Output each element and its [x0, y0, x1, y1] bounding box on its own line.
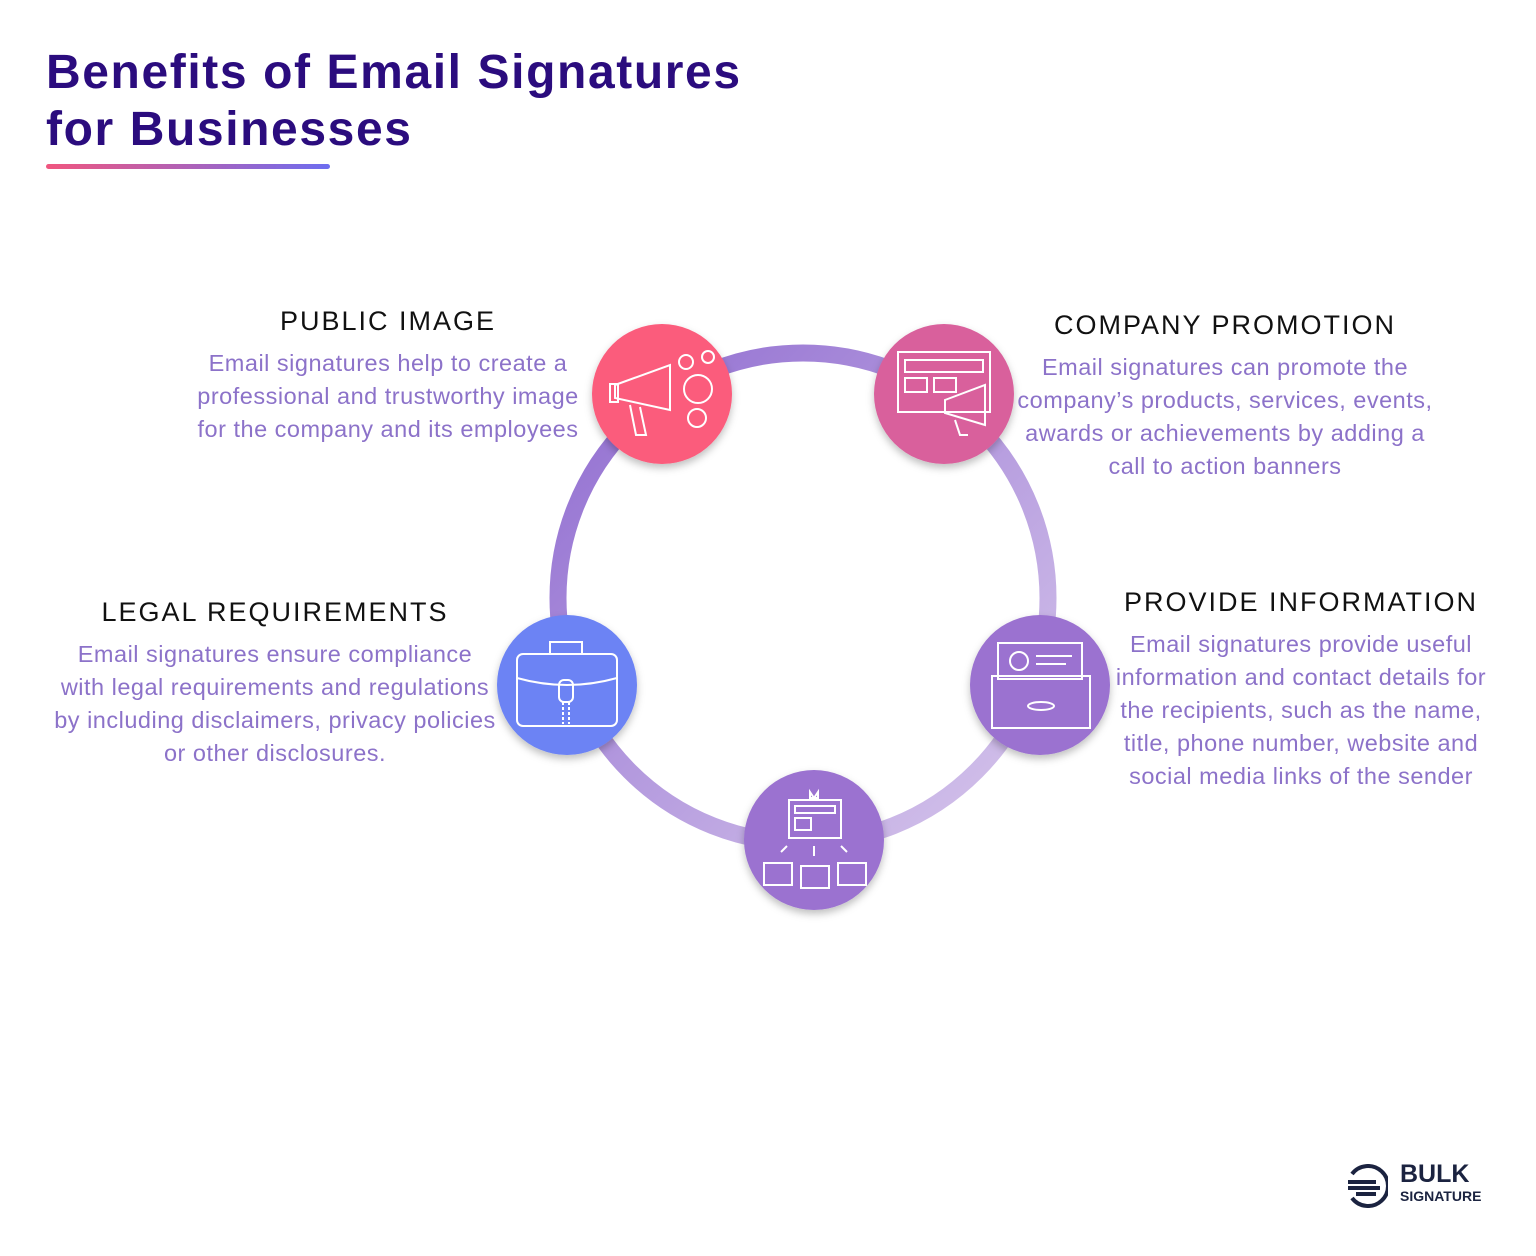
- panel: legal requirements: [54, 597, 496, 766]
- text: provide information: information and contact details for: [1116, 664, 1486, 690]
- panel: provide information: [1116, 587, 1486, 789]
- text: legal requirements: [54, 641, 496, 766]
- text: company promotion: call to action banners: [1108, 453, 1342, 479]
- heading: public image: PUBLIC IMAGE: [280, 306, 496, 336]
- ring: [558, 353, 1048, 843]
- heading: provide information: PROVIDE INFORMATION: [1124, 587, 1478, 617]
- icon: logo mark: [1348, 1164, 1388, 1208]
- icon: megaphone (public image): [592, 324, 732, 464]
- logo: bulk signature: [1348, 1160, 1481, 1208]
- text: logo wordmark: [1400, 1160, 1481, 1204]
- text: logo wordmark: BULK: [1400, 1160, 1469, 1188]
- heading: legal requirements: LEGAL REQUIREMENTS: [101, 597, 449, 627]
- text: company promotion: [1017, 354, 1433, 479]
- icon: web banner megaphone (company promotion): [874, 324, 1014, 464]
- text: legal requirements: or other disclosures.: [164, 740, 386, 766]
- icon: sitemap layouts (bottom): [744, 770, 884, 910]
- text: company promotion: awards or achievements by adding a: [1025, 420, 1425, 446]
- text: public image: for the company and its employees: [198, 416, 578, 442]
- heading: company promotion: COMPANY PROMOTION: [1054, 310, 1396, 340]
- title underline: [46, 164, 330, 169]
- panel: company promotion: [1017, 310, 1433, 479]
- icon: briefcase (legal requirements): [497, 615, 637, 755]
- text: provide information: Email signatures provide useful: [1130, 631, 1472, 657]
- text: public image: Email signatures help to create a: [209, 350, 567, 376]
- text: company promotion: company’s products, services, events,: [1017, 387, 1433, 413]
- title: Benefits of Email Signatures: [46, 46, 742, 99]
- text: legal requirements: by including disclaimers, privacy policies: [54, 707, 496, 733]
- icon: wallet card (provide information): [970, 615, 1110, 755]
- text: public image: professional and trustworthy image: [197, 383, 579, 409]
- text: provide information: social media links of the sender: [1129, 763, 1473, 789]
- panel: public image: [197, 306, 579, 442]
- text: provide information: the recipients, such as the name,: [1120, 697, 1482, 723]
- text: provide information: title, phone number, website and: [1124, 730, 1478, 756]
- title: [46, 46, 742, 156]
- text: legal requirements: Email signatures ensure compliance: [78, 641, 472, 667]
- title: for Businesses: [46, 103, 413, 156]
- text: provide information: [1116, 631, 1486, 789]
- text: logo wordmark: SIGNATURE: [1400, 1188, 1481, 1204]
- text: company promotion: Email signatures can promote the: [1042, 354, 1408, 380]
- text: public image: [197, 350, 579, 442]
- text: legal requirements: with legal requirements and regulations: [61, 674, 489, 700]
